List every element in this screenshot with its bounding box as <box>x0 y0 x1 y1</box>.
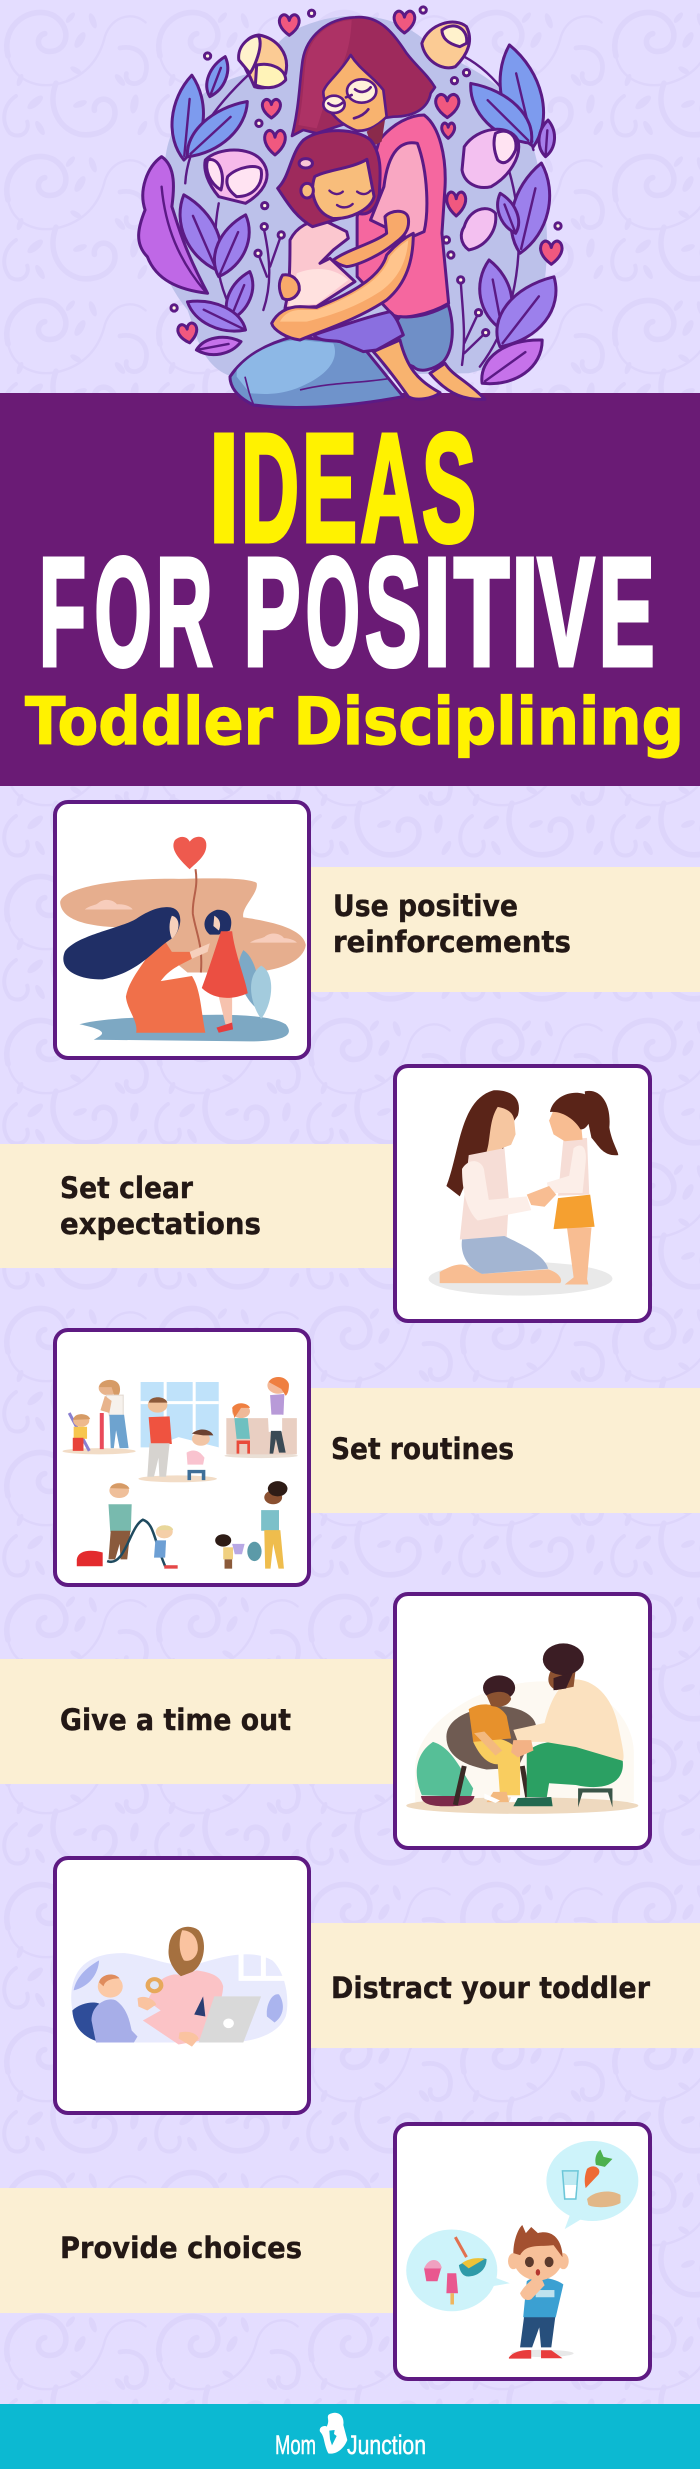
card frame <box>395 1594 650 1848</box>
card illustration: parents and children doing chores <box>62 1377 298 1569</box>
card illustration: mother with baby, rattle and laptop <box>71 1927 287 2047</box>
title banner <box>0 393 700 786</box>
card frame <box>395 1066 650 1321</box>
child's head <box>278 131 380 227</box>
label band <box>0 1144 393 1268</box>
label band <box>311 867 700 992</box>
logo text: Mom: Mom <box>275 2430 316 2460</box>
title text <box>25 402 684 760</box>
tip 2: Set clear expectations <box>0 1066 650 1321</box>
title line: FOR POSITIVE: I <box>511 526 539 698</box>
title line: IDEAS: S <box>422 402 476 574</box>
title line: IDEAS: I <box>208 402 240 574</box>
title line: FOR POSITIVE: R <box>156 526 212 698</box>
tip text: Give a time out <box>60 1703 291 1737</box>
tip 5: Distract your toddler <box>55 1858 700 2113</box>
title line: FOR POSITIVE: T <box>454 526 509 698</box>
card illustration: mother kneeling holding daughter's hands <box>429 1090 618 1296</box>
tip 3: Set routines <box>55 1330 700 1585</box>
label band <box>0 1659 393 1784</box>
label band <box>311 1388 700 1513</box>
title line: FOR POSITIVE: O <box>95 526 152 698</box>
title line: FOR POSITIVE: O <box>306 526 360 698</box>
tip text: Provide choices <box>60 2231 302 2265</box>
title line: FOR POSITIVE: V <box>538 526 594 698</box>
tip text: Set clear <box>60 1171 194 1205</box>
title line: FOR POSITIVE: F <box>39 526 86 698</box>
title line: IDEAS: D <box>241 402 299 574</box>
title line: FOR POSITIVE: I <box>423 526 451 698</box>
title line: FOR POSITIVE: S <box>365 526 422 698</box>
tip text: reinforcements <box>333 925 571 959</box>
tip 4: Give a time out <box>0 1594 650 1848</box>
card illustration: boy deciding between foods <box>406 2141 638 2359</box>
tip text: Set routines <box>331 1432 514 1466</box>
card frame <box>55 802 309 1058</box>
title line: IDEAS: A <box>360 402 418 574</box>
card illustration: mother and daughter with heart balloon <box>60 837 306 1041</box>
title line: FOR POSITIVE: P <box>244 526 300 698</box>
mother's legs, child's legs and hugging arm <box>230 211 485 407</box>
card frame <box>55 1330 309 1585</box>
tip text <box>333 889 571 959</box>
logo text: Junction: Junction <box>347 2430 426 2460</box>
mother's head with glasses <box>292 17 435 147</box>
logo icon: mother and child <box>320 2413 347 2454</box>
tip 1: Use positive reinforcements <box>55 802 700 1058</box>
card frame <box>395 2124 650 2379</box>
tip text: Distract your toddler <box>331 1971 651 2005</box>
tip text: Use positive <box>333 889 518 923</box>
card frame <box>55 1858 309 2113</box>
title line: FOR POSITIVE: E <box>599 526 655 698</box>
hero illustration: mother hugging child among flowers <box>139 7 573 407</box>
tip text: expectations <box>60 1207 261 1241</box>
tip 6: Provide choices <box>0 2124 650 2379</box>
backdrop blob and foliage <box>139 7 573 394</box>
label band <box>311 1923 700 2048</box>
footer bar <box>0 2404 700 2469</box>
tip text <box>60 1171 261 1241</box>
card illustration: father comforting son on chair <box>406 1643 638 1814</box>
title line: IDEAS: E <box>302 402 357 574</box>
MomJunction logo <box>275 2413 426 2460</box>
label band <box>0 2188 393 2313</box>
